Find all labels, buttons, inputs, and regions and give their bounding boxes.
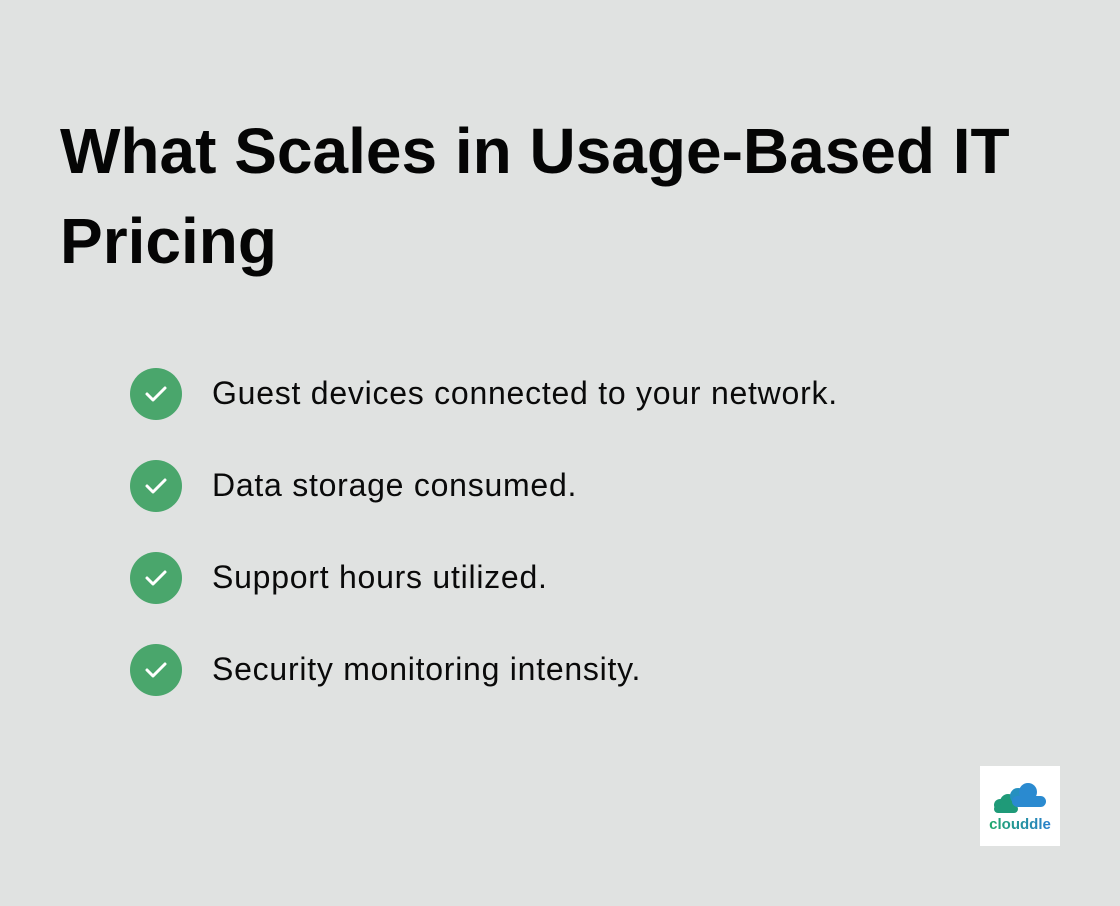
item 4: Security monitoring intensity. xyxy=(212,651,641,687)
item 2: Data storage consumed. xyxy=(212,467,577,503)
item 3: Support hours utilized. xyxy=(212,559,548,595)
item 3 xyxy=(130,552,548,604)
item 1 xyxy=(130,368,838,420)
icon: check xyxy=(130,460,182,512)
icon: check xyxy=(130,552,182,604)
logo xyxy=(980,766,1060,846)
item 2 xyxy=(130,460,577,512)
item 4 xyxy=(130,644,641,696)
title: What Scales in Usage-Based IT Pricing xyxy=(60,115,1010,277)
item 1: Guest devices connected to your network. xyxy=(212,375,838,411)
icon: check xyxy=(130,368,182,420)
logo: clouddle xyxy=(989,816,1051,833)
icon: check xyxy=(130,644,182,696)
